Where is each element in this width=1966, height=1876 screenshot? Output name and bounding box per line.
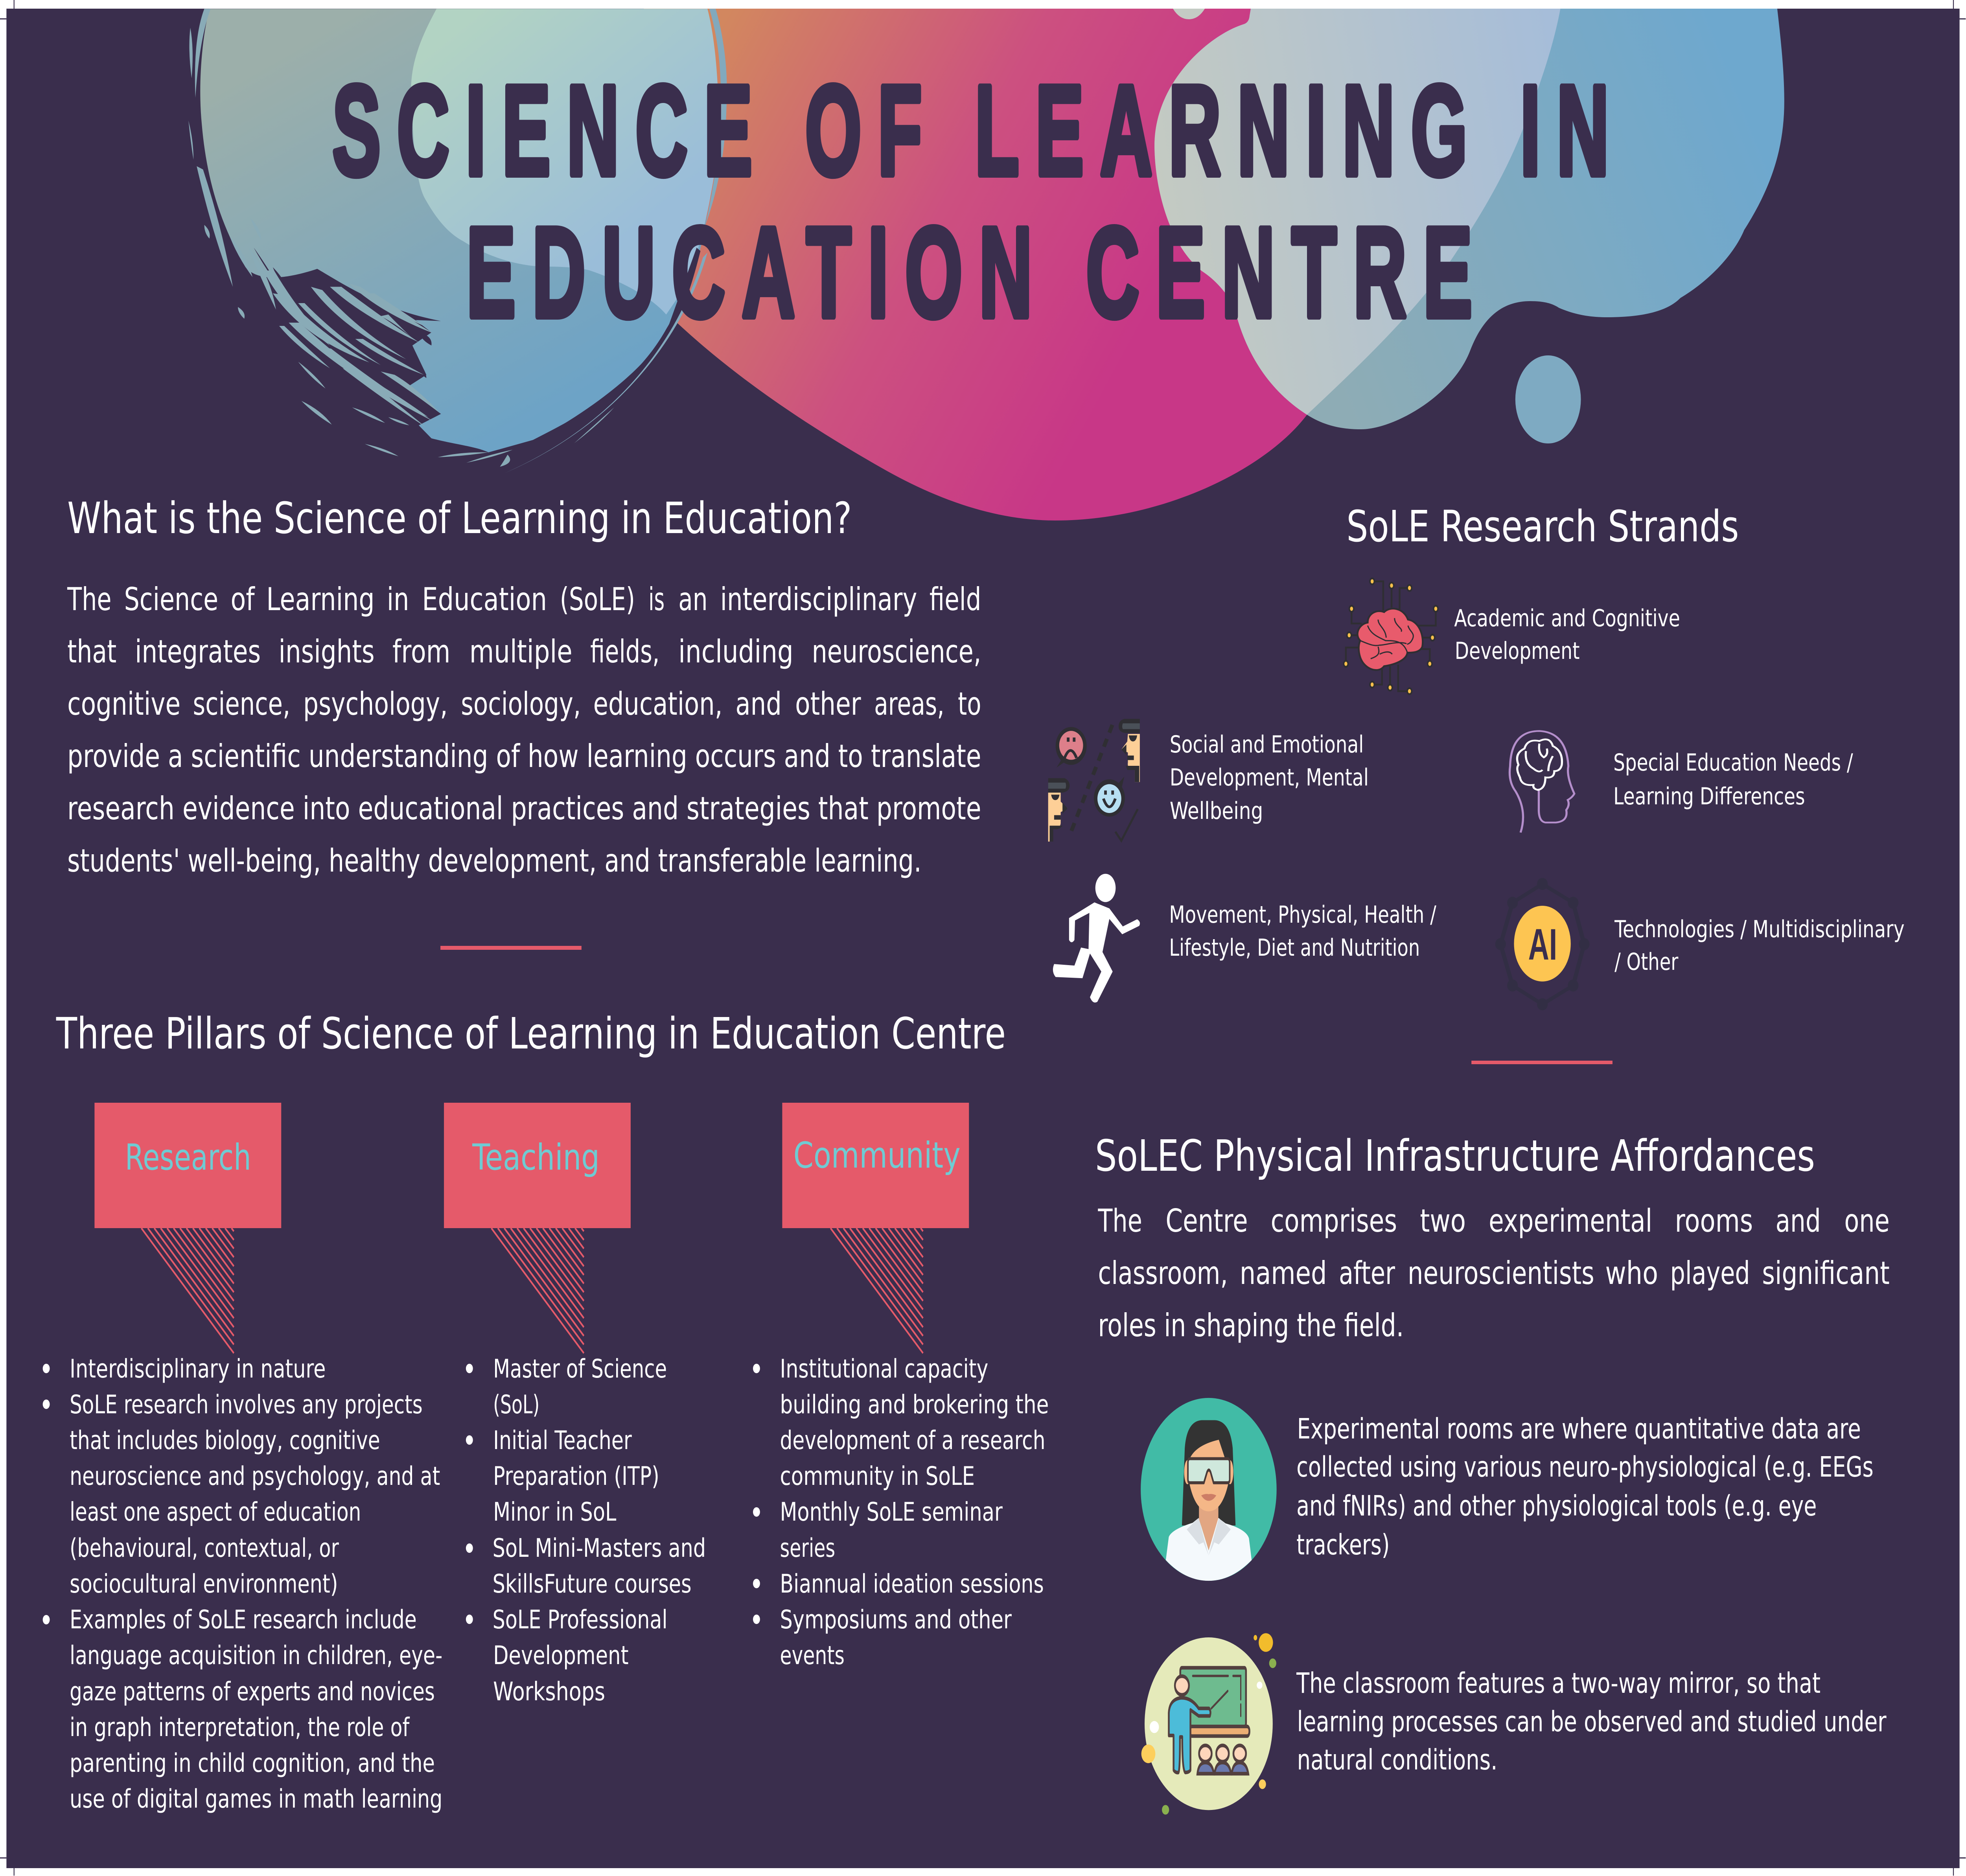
icon: runner: [1053, 874, 1140, 1002]
heading: Three Pillars of Science of Learning in Education Centre: [56, 1008, 1006, 1059]
text block: definition: integrates: [135, 633, 261, 670]
label: academic: Academic and Cognitive: [1454, 605, 1680, 632]
text block: definition: from: [392, 633, 450, 670]
text block: centre description: significant: [1762, 1255, 1890, 1291]
blob: brush circle: [188, 9, 727, 473]
list: teaching: Workshops: [493, 1677, 605, 1707]
text block: definition: to: [958, 686, 981, 722]
panel: what is SoLE: [67, 493, 981, 879]
list: research: (behavioural, contextual, or: [70, 1533, 339, 1563]
icon: scientist with goggles: [1141, 1398, 1277, 1581]
icon: teacher at board: [1141, 1633, 1276, 1815]
text block: definition: research evidence into educational practices and strategies that promote: [67, 790, 981, 827]
text block: experimental rooms: [1296, 1413, 1874, 1561]
text block: definition: (SoLE): [560, 581, 635, 618]
title: [332, 59, 1625, 344]
blob: pale right: [1154, 9, 1784, 429]
icon: AI chip: [1495, 878, 1590, 1010]
text block: definition: Science: [124, 581, 218, 618]
list: research: least one aspect of education: [70, 1497, 361, 1527]
text block: definition: fields,: [590, 633, 660, 670]
label: movement: [1169, 901, 1436, 962]
list: community: Biannual ideation sessions: [780, 1569, 1044, 1599]
text block: definition: science,: [193, 686, 290, 722]
text block: definition: areas,: [874, 686, 944, 722]
list: community: events: [780, 1641, 845, 1670]
list: teaching: SkillsFuture courses: [493, 1569, 692, 1599]
list: research: that includes biology, cognitive: [70, 1425, 380, 1455]
text block: centre description: comprises: [1271, 1203, 1397, 1239]
text block: definition: an: [678, 581, 708, 618]
list: teaching: Minor in SoL: [493, 1497, 616, 1527]
blob: small top drip: [1173, 9, 1205, 19]
text block: centre description: classroom,: [1098, 1255, 1228, 1291]
list: community: [753, 1354, 1049, 1670]
panel: research strands: [1048, 501, 1905, 1010]
text block: classroom: learning processes can be observed and studied under: [1297, 1705, 1887, 1738]
label: movement: Movement, Physical, Health /: [1169, 901, 1436, 929]
icon: social faces: [1048, 719, 1140, 842]
list: teaching: Preparation (ITP): [493, 1461, 659, 1491]
text block: definition: and: [735, 686, 782, 722]
text block: definition: Education: [422, 581, 547, 618]
text block: definition: is: [648, 581, 665, 618]
text block: definition: in: [387, 581, 409, 618]
label: movement: Lifestyle, Diet and Nutrition: [1169, 934, 1420, 962]
text block: classroom: The classroom features a two-way mirror, so that: [1296, 1667, 1821, 1699]
label: social: Development, Mental: [1170, 764, 1369, 791]
list: research: use of digital games in math learning: [70, 1784, 442, 1814]
heading: SoLEC Physical Infrastructure Affordances: [1095, 1131, 1815, 1181]
text block: definition: neuroscience,: [812, 633, 981, 670]
decorative header blobs: [188, 9, 1784, 520]
label: social: [1170, 731, 1369, 825]
text block: definition: sociology,: [461, 686, 581, 722]
text block: classroom: [1296, 1667, 1887, 1776]
pillar: community: Community: [793, 1135, 961, 1176]
icon: AI chip: AI: [1528, 920, 1557, 969]
list: community: building and brokering the: [780, 1390, 1049, 1420]
text block: centre description: neuroscientists: [1408, 1255, 1594, 1291]
label: technologies: Technologies / Multidisciplinary: [1614, 916, 1905, 943]
text block: centre description: two: [1420, 1203, 1466, 1239]
list: research: [43, 1354, 442, 1814]
label: social: Social and Emotional: [1170, 731, 1364, 758]
panel: physical infrastructure: [1095, 1131, 1890, 1815]
label: technologies: [1614, 916, 1905, 976]
icon: circuit brain: [1343, 578, 1439, 695]
list: teaching: Initial Teacher: [493, 1425, 632, 1455]
text block: centre description: [1098, 1203, 1890, 1344]
text block: definition: students' well-being, healthy development, and transferable learning.: [67, 842, 922, 879]
pillar: teaching: Teaching: [472, 1137, 600, 1178]
list: teaching: [466, 1354, 706, 1707]
list: teaching: SoL Mini-Masters and: [493, 1533, 706, 1563]
list: community: series: [780, 1533, 835, 1563]
list: research: parenting in child cognition, and the: [70, 1748, 435, 1778]
blob: pink centre: [644, 9, 1346, 520]
label: special education: [1613, 749, 1853, 810]
list: research: Examples of SoLE research include: [70, 1605, 417, 1635]
text block: definition: The: [67, 581, 112, 618]
label: special education: Special Education Needs /: [1613, 749, 1853, 776]
title: EDUCATION CENTRE: [466, 201, 1489, 344]
text block: definition: field: [930, 581, 981, 618]
pillar: research: [94, 1103, 281, 1353]
text block: experimental rooms: collected using various neuro-physiological (e.g. EEGs: [1296, 1451, 1874, 1483]
list: research: SoLE research involves any projects: [70, 1390, 423, 1420]
icon: head with brain: [1509, 731, 1574, 833]
list: teaching: (SoL): [493, 1390, 539, 1420]
text block: experimental rooms: trackers): [1296, 1528, 1390, 1561]
heading: What is the Science of Learning in Education?: [67, 493, 852, 543]
text block: definition: of: [230, 581, 255, 618]
text block: experimental rooms: Experimental rooms are where quantitative data are: [1297, 1413, 1861, 1445]
pillar: teaching: [444, 1103, 631, 1353]
text block: experimental rooms: and fNIRs) and other physiological tools (e.g. eye: [1296, 1490, 1817, 1522]
list: research: Interdisciplinary in nature: [70, 1354, 326, 1384]
list: community: Monthly SoLE seminar: [780, 1497, 1003, 1527]
pillar: research: Research: [125, 1137, 251, 1178]
text block: definition: provide a scientific understanding of how learning occurs and to translate: [67, 738, 981, 774]
list: research: sociocultural environment): [70, 1569, 338, 1599]
text block: centre description: The: [1098, 1203, 1142, 1239]
text block: centre description: rooms: [1675, 1203, 1753, 1239]
list: research: neuroscience and psychology, and at: [70, 1461, 440, 1491]
label: technologies: / Other: [1614, 949, 1679, 976]
text block: centre description: played: [1670, 1255, 1750, 1291]
blob: pale right highlight: [1154, 9, 1560, 415]
text block: definition: psychology,: [303, 686, 448, 722]
blob: small circle: [1515, 355, 1581, 443]
text block: centre description: after: [1339, 1255, 1395, 1291]
panel: three pillars: [43, 1008, 1049, 1814]
list: research: in graph interpretation, the role of: [70, 1712, 410, 1742]
text block: definition: that: [67, 633, 116, 670]
pillar: community: [782, 1103, 969, 1353]
list: community: Institutional capacity: [780, 1354, 988, 1384]
label: special education: Learning Differences: [1613, 783, 1805, 810]
text block: definition: insights: [279, 633, 375, 670]
text block: classroom: natural conditions.: [1297, 1744, 1497, 1776]
text block: centre description: named: [1240, 1255, 1327, 1291]
label: academic: Development: [1455, 638, 1580, 665]
text block: definition: Learning: [266, 581, 375, 618]
list: community: community in SoLE: [780, 1461, 975, 1491]
list: teaching: Development: [493, 1641, 629, 1670]
text block: centre description: Centre: [1165, 1203, 1248, 1239]
list: community: Symposiums and other: [780, 1605, 1012, 1635]
label: academic: [1454, 605, 1680, 665]
text block: centre description: and: [1775, 1203, 1821, 1239]
list: teaching: SoLE Professional: [493, 1605, 668, 1635]
list: teaching: Master of Science: [493, 1354, 667, 1384]
list: research: gaze patterns of experts and novices: [70, 1677, 435, 1707]
text block: definition: other: [795, 686, 861, 722]
text block: definition: cognitive: [67, 686, 180, 722]
list: community: development of a research: [780, 1425, 1046, 1455]
text block: definition: interdisciplinary: [720, 581, 917, 618]
heading: SoLE Research Strands: [1346, 501, 1739, 552]
list: research: language acquisition in children, eye-: [70, 1641, 442, 1670]
text block: definition: [67, 581, 981, 879]
text block: centre description: who: [1605, 1255, 1658, 1291]
text block: definition: multiple: [469, 633, 572, 670]
text block: definition: education,: [593, 686, 723, 722]
label: social: Wellbeing: [1170, 798, 1263, 825]
text block: definition: including: [678, 633, 793, 670]
text block: centre description: one: [1844, 1203, 1890, 1239]
text block: centre description: roles in shaping the field.: [1098, 1307, 1404, 1344]
text block: centre description: experimental: [1489, 1203, 1652, 1239]
